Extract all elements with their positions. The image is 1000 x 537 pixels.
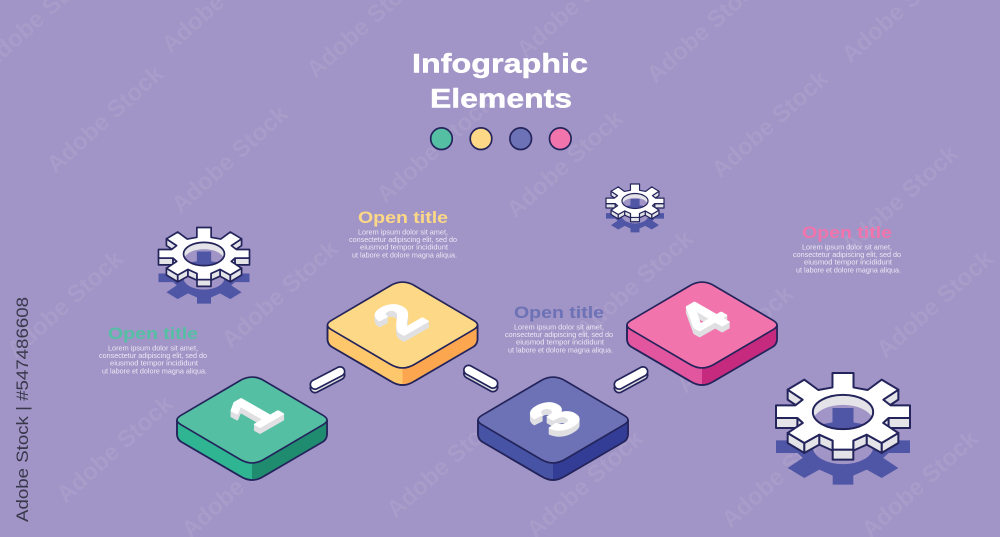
colour dots legend	[431, 128, 571, 150]
watermark pattern: Adobe Stock	[716, 415, 844, 534]
text block 3: Lorem ipsum dolor sit amet,	[514, 322, 604, 332]
text block 4: Lorem ipsum dolor sit amet,	[802, 242, 892, 252]
text block 3: eiusmod tempor incididunt	[516, 338, 604, 347]
watermark pattern: Adobe Stock	[671, 280, 799, 399]
watermark pattern: Adobe Stock	[571, 225, 699, 344]
tile 3: indigo	[478, 377, 628, 480]
gear: top centre	[606, 184, 664, 232]
watermark pattern: Adobe Stock	[1, 245, 129, 364]
watermark pattern: Adobe Stock	[836, 140, 964, 259]
text block 4: consectetur adipiscing elit, sed do	[793, 250, 901, 259]
text block 2: consectetur adipiscing elit, sed do	[349, 235, 457, 244]
watermark pattern: Adobe Stock	[381, 405, 509, 524]
tile 4: pink	[627, 282, 777, 386]
watermark pattern: Adobe Stock	[371, 90, 499, 209]
text block 1: consectetur adipiscing elit, sed do	[99, 351, 207, 360]
connector bar 3 to 4	[619, 372, 643, 388]
stock id side label: Adobe Stock | #547486608	[14, 297, 32, 522]
watermark pattern: Adobe Stock	[706, 65, 834, 184]
tile 2: yellow	[328, 282, 478, 386]
text block 3: Open title	[514, 303, 604, 322]
text block 3: consectetur adipiscing elit, sed do	[505, 330, 613, 339]
numeral 1: 1	[213, 388, 296, 436]
text block 4: Open title	[802, 223, 892, 242]
watermark pattern: Adobe Stock	[871, 245, 999, 364]
text block 2: eiusmod tempor incididunt	[360, 243, 448, 252]
watermark pattern: Adobe Stock	[51, 390, 179, 509]
connector bar 1 to 2	[315, 372, 340, 388]
text block 4	[793, 223, 901, 274]
text block 4: ut labore et dolore magna aliqua.	[796, 265, 901, 274]
connector bar 2 to 3	[468, 370, 493, 387]
text block 4: eiusmod tempor incididunt	[804, 258, 892, 267]
title	[412, 48, 588, 114]
text block 2: Open title	[358, 208, 448, 227]
text block 2: Lorem ipsum dolor sit amet,	[358, 228, 448, 236]
numeral 2: 2	[358, 295, 441, 343]
title: Infographic	[412, 48, 588, 78]
text block 1: eiusmod tempor incididunt	[110, 359, 198, 368]
text block 3	[505, 303, 613, 354]
text block 1: Lorem ipsum dolor sit amet,	[108, 344, 198, 352]
text block 1: ut labore et dolore magna aliqua.	[102, 366, 207, 375]
text block 1: Open title	[108, 324, 198, 343]
text block 2: ut labore et dolore magna aliqua.	[352, 250, 457, 259]
tile 1: green	[177, 377, 327, 480]
text block 1	[99, 324, 207, 375]
numeral 3: 3	[514, 393, 597, 441]
gear: upper left	[158, 228, 250, 304]
watermark pattern: Adobe Stock	[216, 235, 344, 354]
title: Elements	[430, 84, 572, 114]
text block 2	[349, 208, 457, 259]
numeral 4: 4	[662, 294, 745, 342]
watermark pattern: Adobe Stock	[41, 60, 169, 179]
gear: lower right	[776, 373, 910, 485]
watermark pattern: Adobe Stock	[166, 100, 294, 219]
text block 3: ut labore et dolore magna aliqua.	[508, 345, 613, 354]
watermark pattern: Adobe Stock	[501, 105, 629, 224]
